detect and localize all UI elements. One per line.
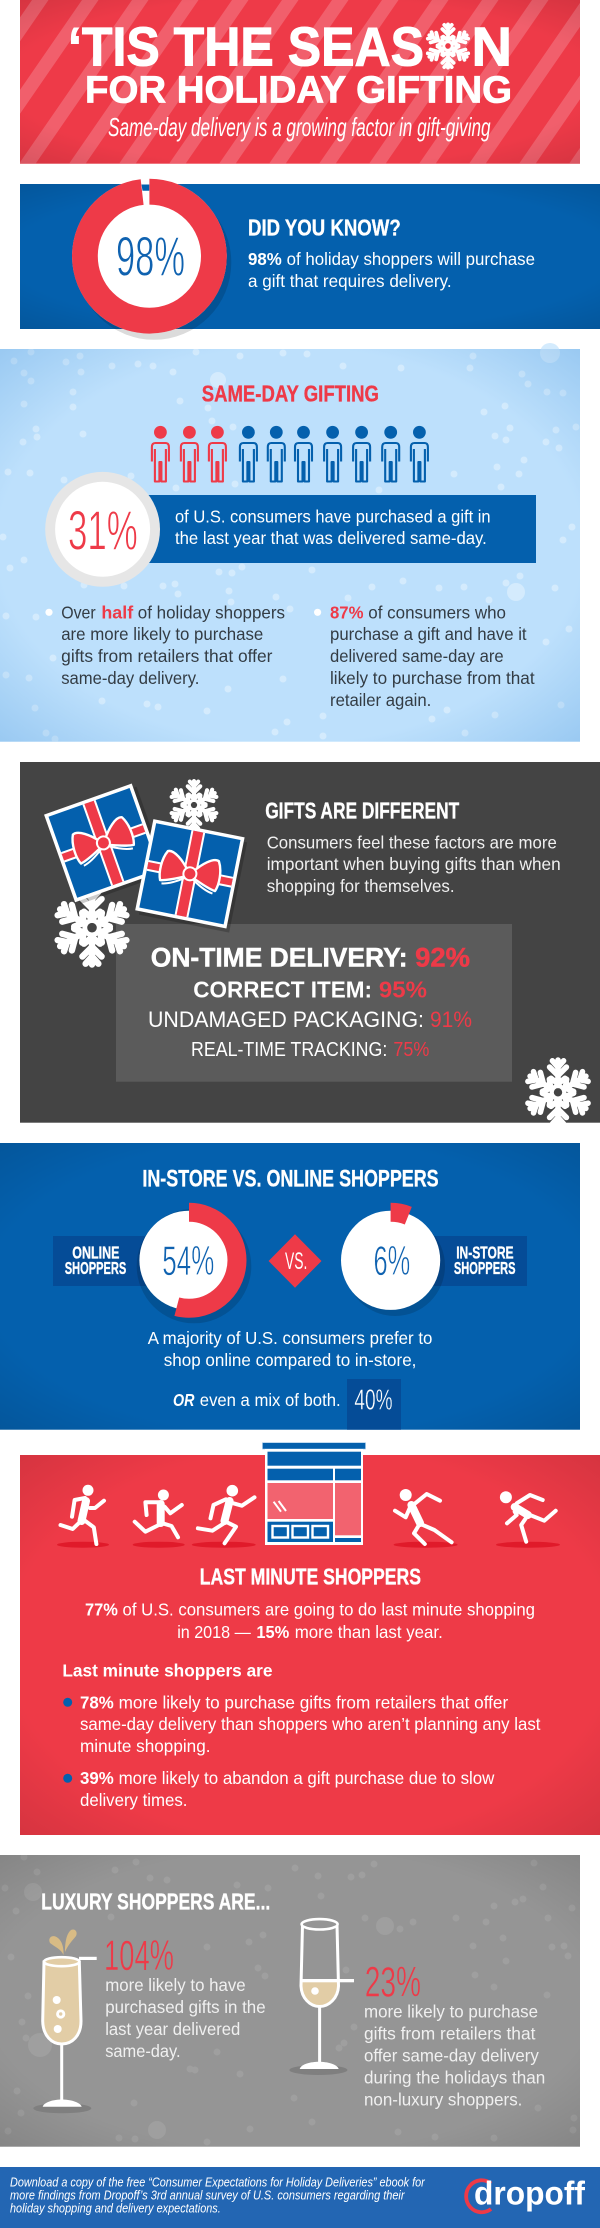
donut chart 6%	[341, 1211, 445, 1316]
text: consumers feel: Consumers feel these factors are more	[267, 832, 557, 852]
donut chart 54%	[137, 1209, 251, 1323]
text: download note: Download a copy of the free “Consumer Expectations for Holiday Deliveries” ebook for	[10, 2175, 425, 2190]
panel: luxury shoppers	[0, 1855, 580, 2147]
text: consumers feel: important when buying gifts than when	[267, 854, 561, 874]
stat: real-time tracking 75%: REAL-TIME TRACKING:	[191, 1039, 387, 1061]
heading: last minute shoppers: LAST MINUTE SHOPPERS	[200, 1563, 421, 1589]
text: 23% description: gifts from retailers that	[364, 2023, 536, 2043]
text: majority: shop online compared to in-store,	[164, 1350, 416, 1370]
donut chart 98%	[72, 179, 231, 340]
label: in-store shoppers	[430, 1236, 527, 1286]
panel: header	[20, 0, 580, 164]
icon: store	[262, 1443, 366, 1545]
title line one: ‘TIS THE SEAS	[68, 17, 424, 78]
text: majority: even a mix of both.	[200, 1390, 341, 1410]
bullet: 39%: more likely to abandon a gift purchase due to slow	[119, 1768, 495, 1788]
text: over half bullet	[45, 602, 285, 688]
bullet: 78%	[63, 1692, 541, 1756]
text: 23% description: during the holidays than	[364, 2067, 545, 2087]
text: download note: holiday shopping and delivery expectations.	[10, 2201, 221, 2216]
callout: 31% bar: 31%	[68, 498, 138, 561]
panel: in-store vs online	[0, 1143, 580, 1430]
label: online shoppers: SHOPPERS	[65, 1258, 126, 1278]
icon: snowflake in title	[426, 24, 470, 68]
icon: full champagne glass	[33, 1929, 97, 2113]
icon: snowflake left	[55, 891, 129, 964]
text: 87% bullet: 87%	[330, 602, 364, 622]
icon: gift left	[44, 782, 167, 906]
stat: on-time delivery 92%: 92%	[415, 943, 470, 973]
text: 77% statement: 15%	[256, 1622, 289, 1642]
text: 77% statement: more than last year.	[295, 1622, 443, 1642]
logo: dropoff: dropoff	[474, 2174, 586, 2211]
diamond: vs	[269, 1234, 322, 1288]
panel: gifts are different	[20, 762, 600, 1124]
text: 87% bullet: retailer again.	[330, 690, 431, 710]
text: consumers feel: shopping for themselves.	[267, 876, 455, 896]
text: 98% statement: a gift that requires delivery.	[248, 271, 452, 291]
text: majority: A majority of U.S. consumers prefer to	[148, 1328, 432, 1348]
bullet: 78%: same-day delivery than shoppers who aren’t planning any last	[80, 1714, 541, 1734]
text: over half bullet: same-day delivery.	[61, 668, 199, 688]
label: in-store shoppers: IN-STORE	[456, 1242, 514, 1262]
label: online shoppers	[53, 1236, 153, 1286]
text: download note	[10, 2175, 425, 2216]
text: 98% statement: 98%	[248, 249, 282, 269]
bullet: 39%: 39%	[80, 1768, 114, 1788]
heading: in-store vs online: IN-STORE VS. ONLINE SHOPPERS	[142, 1166, 439, 1193]
text: 77% statement: in 2018 —	[177, 1622, 251, 1642]
stat: 104%: 104%	[104, 1932, 174, 1980]
icon: snowflake top	[170, 781, 218, 829]
label: in-store shoppers: SHOPPERS	[454, 1258, 516, 1278]
text: 77% statement: 77%	[85, 1600, 118, 1620]
text: over half bullet: are more likely to purchase	[61, 624, 263, 644]
stat: correct item 95%: CORRECT ITEM:	[193, 977, 372, 1003]
text: 87% bullet: of consumers who	[368, 602, 506, 622]
text: 77% statement: of U.S. consumers are going to do last minute shopping	[122, 1600, 535, 1620]
text: 77% statement	[85, 1600, 535, 1642]
icon: snowflake bottom right	[526, 1060, 590, 1124]
text: 23% description: non-luxury shoppers.	[364, 2089, 522, 2109]
text: 87% bullet: delivered same-day are	[330, 646, 504, 666]
heading: same-day gifting: SAME-DAY GIFTING	[202, 381, 379, 407]
text: 104% description: last year delivered	[105, 2019, 240, 2039]
text: 104% description: same-day.	[105, 2041, 181, 2061]
label: online shoppers: ONLINE	[72, 1242, 119, 1262]
text: majority	[148, 1328, 432, 1410]
text: majority: OR	[173, 1390, 195, 1410]
stat: real-time tracking 75%: 75%	[393, 1039, 430, 1061]
text: 87% bullet: purchase a gift and have it	[330, 624, 527, 644]
callout: 31% bar: of U.S. consumers have purchased a gift in	[175, 506, 491, 526]
subheading: last minute shoppers are: Last minute shoppers are	[62, 1661, 273, 1681]
callout: 40%	[347, 1379, 401, 1430]
text: consumers feel	[267, 832, 561, 896]
panel: did you know	[20, 179, 600, 340]
text: over half bullet: Over	[61, 602, 96, 622]
text: 104% description	[105, 1975, 266, 2061]
stats box	[116, 924, 512, 1082]
stat: undamaged packaging 91%: UNDAMAGED PACKAGING:	[148, 1007, 424, 1032]
bullet: 39%: delivery times.	[80, 1790, 188, 1810]
text: over half bullet: gifts from retailers that offer	[61, 646, 273, 666]
title line one: N	[472, 17, 512, 78]
donut chart 54%: 54%	[162, 1237, 214, 1284]
text: 23% description	[364, 2001, 545, 2109]
text: over half bullet: half	[101, 602, 133, 622]
heading: luxury shoppers: LUXURY SHOPPERS ARE...	[41, 1888, 270, 1914]
text: 98% statement	[248, 249, 535, 291]
stat: on-time delivery 92%: ON-TIME DELIVERY:	[151, 943, 408, 973]
bullet: 78%: 78%	[80, 1692, 114, 1712]
icon: gift right	[135, 819, 248, 933]
text: 87% bullet	[314, 602, 535, 710]
callout: 31% bar: the last year that was delivered same-day.	[175, 528, 487, 548]
text: 23% description: more likely to purchase	[364, 2001, 538, 2021]
panel: last minute shoppers	[20, 1443, 600, 1835]
text: over half bullet: of holiday shoppers	[138, 602, 285, 622]
callout: 40%: 40%	[354, 1384, 393, 1416]
heading: did you know: DID YOU KNOW?	[248, 215, 401, 241]
donut chart 98%: 98%	[116, 225, 185, 288]
panel: footer	[0, 2167, 600, 2228]
callout: 31% bar	[45, 472, 536, 587]
bullet: 78%: minute shopping.	[80, 1736, 210, 1756]
text: 104% description: purchased gifts in the	[105, 1997, 266, 2017]
bullet: 78%: more likely to purchase gifts from retailers that offer	[119, 1692, 508, 1712]
text: 104% description: more likely to have	[105, 1975, 246, 1995]
bullet: 39%	[63, 1768, 495, 1810]
stat: correct item 95%: 95%	[379, 977, 427, 1003]
heading: gifts are different: GIFTS ARE DIFFERENT	[265, 798, 460, 824]
diamond: vs: VS.	[285, 1248, 307, 1275]
icon: ground shadows	[57, 1542, 560, 1548]
icon: partly filled champagne glass	[289, 1919, 354, 2075]
icon: runners	[60, 1485, 556, 1544]
text: download note: more findings from Dropoff’s 3rd annual survey of U.S. consumers regarding their	[10, 2188, 405, 2203]
text: 98% statement: of holiday shoppers will purchase	[287, 249, 535, 269]
stat: undamaged packaging 91%: 91%	[430, 1007, 472, 1032]
donut chart 6%: 6%	[374, 1237, 410, 1284]
text: 87% bullet: likely to purchase from that	[330, 668, 535, 688]
stat: 23%: 23%	[365, 1959, 421, 2007]
panel: same-day gifting	[0, 343, 580, 742]
title line two: FOR HOLIDAY GIFTING	[85, 69, 512, 111]
text: 23% description: offer same-day delivery	[364, 2045, 539, 2065]
pictogram: 3 of 10 people	[152, 426, 428, 482]
